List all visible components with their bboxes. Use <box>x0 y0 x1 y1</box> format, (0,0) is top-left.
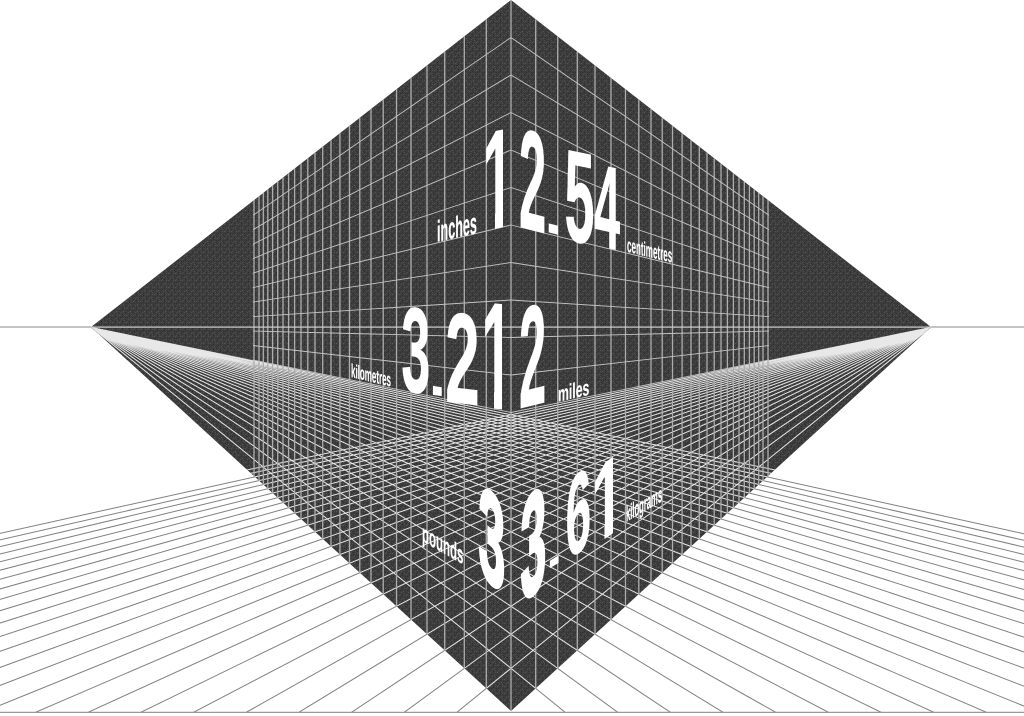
label: kilometres: kilometres <box>351 361 391 392</box>
label: kilograms: kilograms <box>626 481 662 527</box>
outer floor perspective lines <box>0 327 1024 713</box>
horizon line <box>0 326 1024 328</box>
number: 12.54: 2 <box>519 99 546 264</box>
number: 33.61: . <box>546 516 563 582</box>
panel: upper wall diamond <box>91 0 931 412</box>
number: 33.61: 3 <box>478 455 505 622</box>
number: 3.212 <box>402 303 544 410</box>
number: 3.212: 2 <box>445 286 480 433</box>
panel: lower floor diamond <box>91 327 931 711</box>
number: 3.212: 3 <box>401 281 430 420</box>
number: 3.212: . <box>429 340 446 410</box>
label: centimetres: centimetres <box>627 235 672 268</box>
number: 12.54: 1 <box>482 97 513 261</box>
number: 12.54 <box>486 130 620 250</box>
number: 33.61 <box>478 457 613 598</box>
number: 3.212: 1 <box>482 270 512 443</box>
horizon line across the diamond <box>91 326 931 328</box>
label: inches: inches <box>437 206 477 248</box>
number: 12.54: . <box>544 177 563 249</box>
wall horizontal grid lines <box>253 38 769 412</box>
vertical grid lines <box>254 0 768 711</box>
number: 33.61: 6 <box>566 442 591 587</box>
number: 12.54: 5 <box>564 123 595 274</box>
number: 33.61: 3 <box>521 454 546 634</box>
floor grid lines <box>92 328 930 689</box>
label: pounds: pounds <box>422 520 463 571</box>
number: 3.212: 2 <box>519 272 546 439</box>
ground rule <box>0 712 1024 713</box>
number: 33.61: 1 <box>591 426 624 572</box>
number: 12.54: 4 <box>594 139 620 277</box>
label: miles: miles <box>558 375 589 407</box>
